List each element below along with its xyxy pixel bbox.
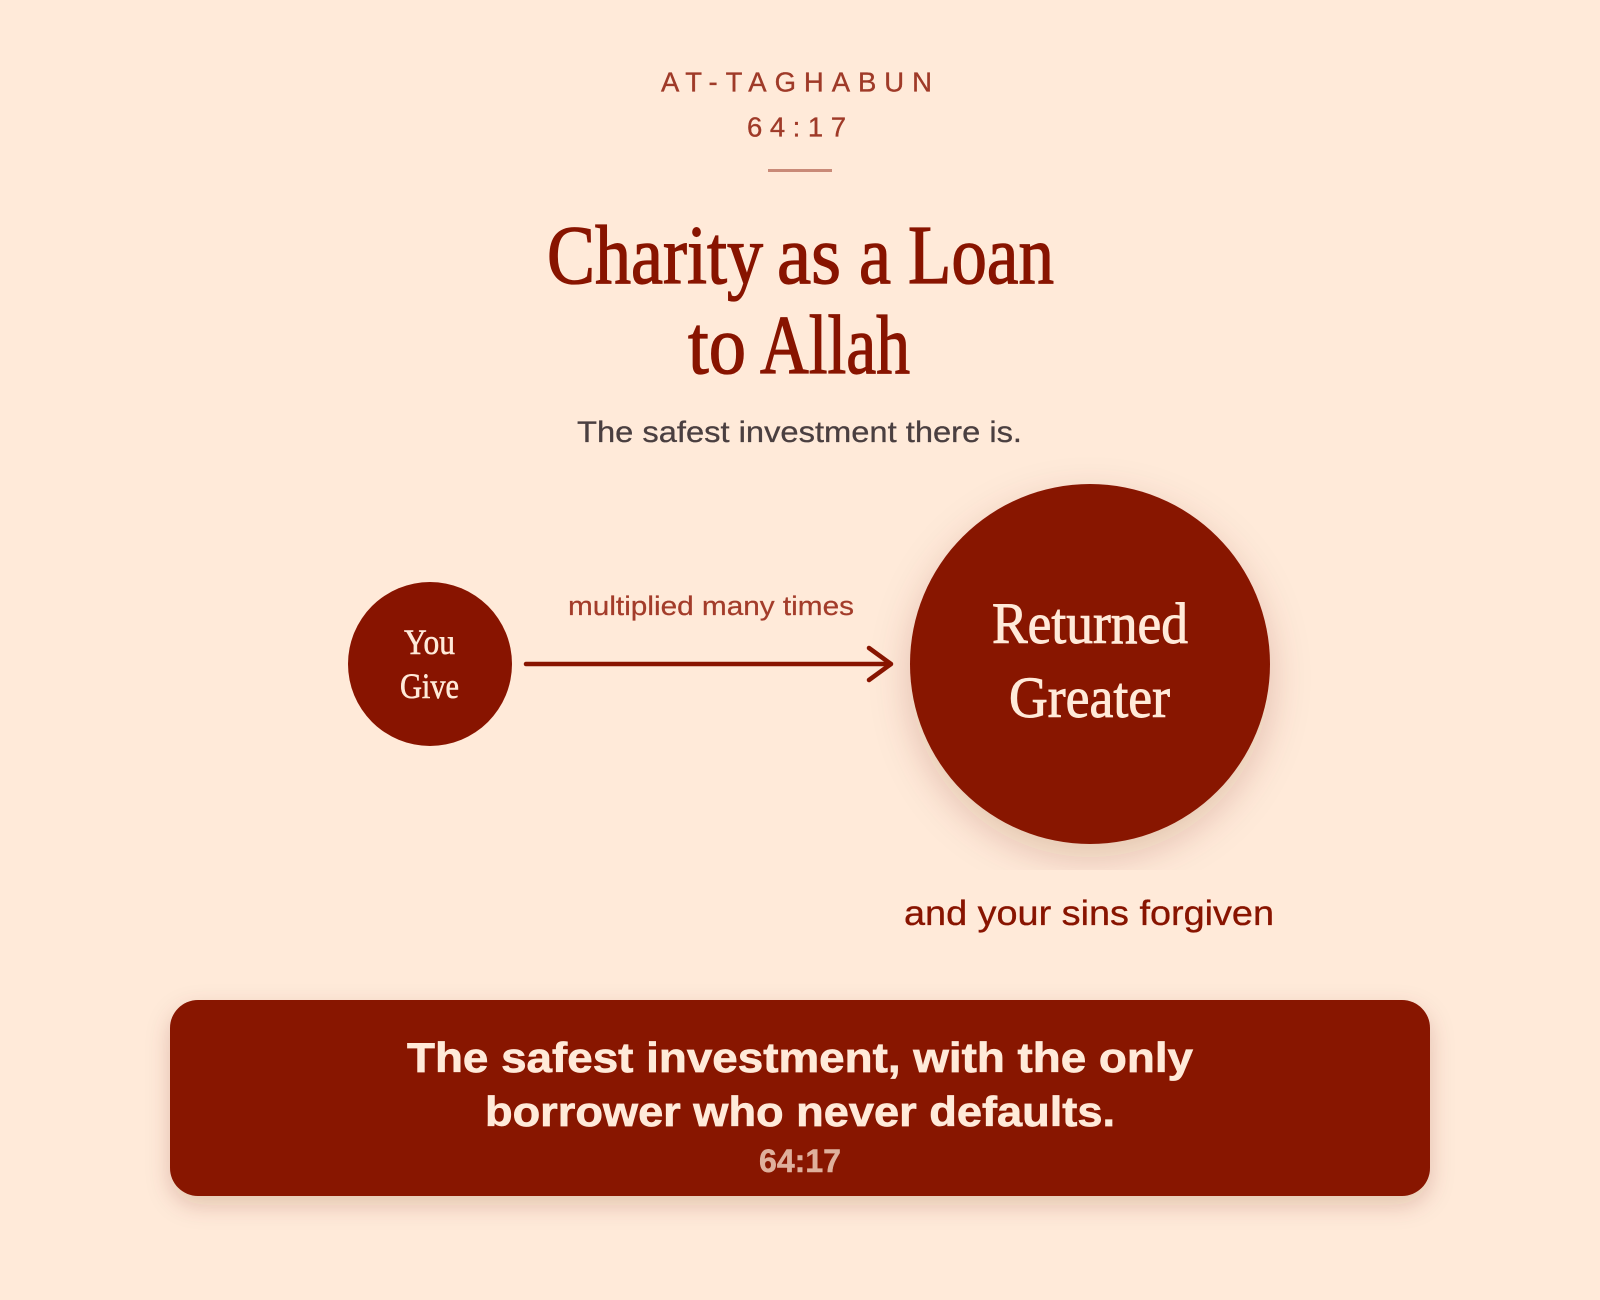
title: as bbox=[777, 209, 841, 302]
banner text bbox=[407, 1034, 1194, 1135]
eyebrow: verse reference: 64:17 bbox=[747, 112, 846, 142]
diagram: giving multiplied bbox=[348, 484, 1274, 933]
circle: you give: Give bbox=[400, 666, 459, 706]
arrow label: multiplied many times bbox=[568, 591, 854, 621]
title: a bbox=[859, 209, 891, 302]
header bbox=[547, 66, 1054, 449]
takeaway banner bbox=[170, 1000, 1430, 1196]
circle: you give bbox=[348, 582, 512, 746]
eyebrow: surah name: AT-TAGHABUN bbox=[661, 66, 932, 98]
banner text: The safest investment, with the only bbox=[407, 1034, 1194, 1081]
banner text: borrower who never defaults. bbox=[485, 1088, 1115, 1135]
title: Allah bbox=[760, 299, 910, 392]
arrow bbox=[526, 648, 891, 680]
caption: sins forgiven: and your sins forgiven bbox=[904, 894, 1274, 933]
title: to bbox=[688, 299, 746, 392]
title: Loan bbox=[908, 209, 1054, 302]
circle: returned greater: Greater bbox=[1009, 665, 1170, 730]
title bbox=[547, 209, 1054, 392]
circle: you give: You bbox=[404, 622, 455, 662]
banner reference: 64:17 bbox=[759, 1143, 841, 1179]
title: Charity bbox=[547, 209, 763, 302]
circle: returned greater: Returned bbox=[992, 591, 1188, 656]
subtitle: The safest investment there is. bbox=[577, 416, 1022, 449]
circle: returned greater bbox=[910, 484, 1270, 844]
